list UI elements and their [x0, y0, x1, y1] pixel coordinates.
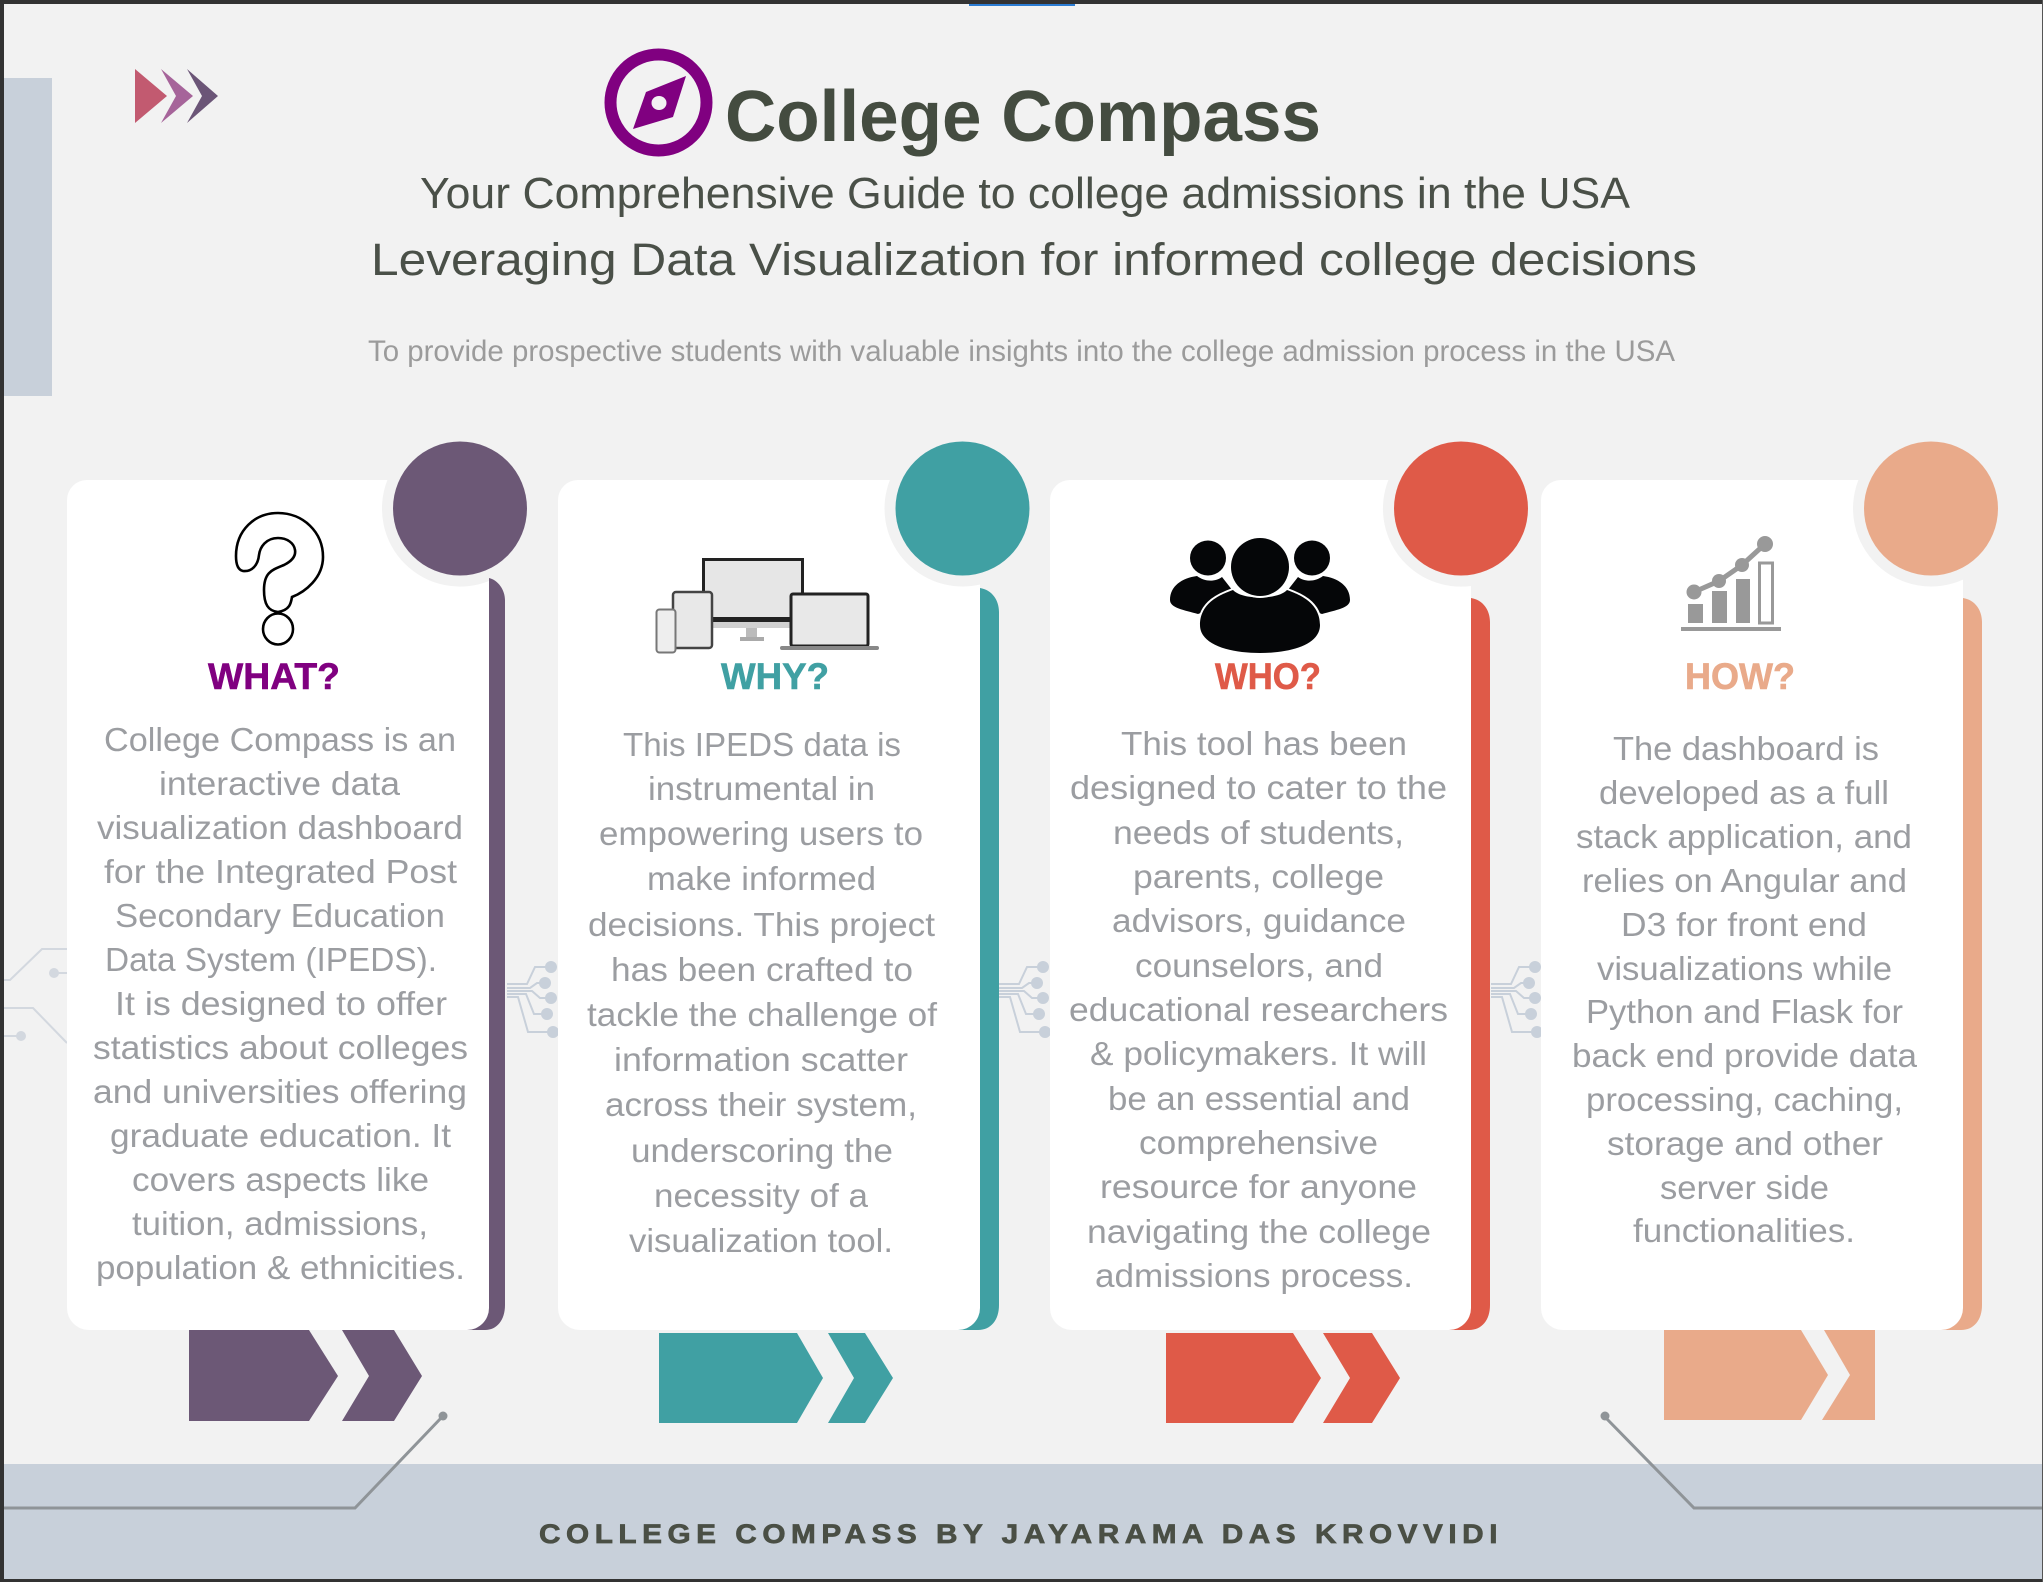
body text: back end provide data: [1572, 1037, 1918, 1074]
arrow: how chevrons: [1664, 1330, 1875, 1420]
arrow: what chevrons: [189, 1330, 422, 1421]
body text: has been crafted to: [611, 951, 913, 988]
body text: underscoring the: [631, 1132, 893, 1169]
panel: why: [558, 442, 1030, 1423]
side accent block: [4, 78, 52, 396]
badge circle: [393, 442, 527, 576]
body text: statistics about colleges: [93, 1029, 468, 1066]
body text: developed as a full: [1599, 774, 1889, 811]
body text: information scatter: [614, 1041, 908, 1078]
icon: triple chevrons: [135, 69, 218, 123]
body text: covers aspects like: [132, 1161, 429, 1198]
body text: tackle the challenge of: [587, 996, 938, 1033]
body text: functionalities.: [1633, 1212, 1855, 1249]
icon: people: [1170, 538, 1350, 653]
body text: for the Integrated Post: [104, 853, 457, 890]
body text: be an essential and: [1108, 1080, 1410, 1117]
panel: what: [67, 442, 527, 1421]
connector line right: [1600, 1412, 2042, 1508]
body text: graduate education. It: [110, 1117, 451, 1154]
body text: parents, college: [1133, 858, 1384, 895]
connector line left: [4, 1412, 448, 1508]
body text: empowering users to: [599, 815, 923, 852]
body text: [93, 721, 468, 1286]
body text: necessity of a: [654, 1177, 869, 1214]
body text: comprehensive: [1139, 1124, 1378, 1161]
subtitle line 1: Your Comprehensive Guide to college admissions in the USA: [420, 169, 1631, 218]
panel: who: [1050, 442, 1528, 1423]
body text: educational researchers: [1069, 991, 1448, 1028]
circuit decoration: between who and how: [1491, 961, 1543, 1038]
body text: Python and Flask for: [1586, 993, 1903, 1030]
body text: decisions. This project: [588, 906, 935, 943]
arrow: why chevrons: [659, 1333, 893, 1423]
accent bar: [1930, 598, 1982, 1330]
body text: counselors, and: [1135, 947, 1383, 984]
body text: & policymakers. It will: [1090, 1035, 1427, 1072]
badge circle: [1394, 442, 1528, 576]
body text: tuition, admissions,: [132, 1205, 428, 1242]
circuit decoration: between what and why: [507, 961, 559, 1038]
body text: visualizations while: [1597, 950, 1892, 987]
body text: College Compass is an: [104, 721, 456, 758]
footer credit: COLLEGE COMPASS BY JAYARAMA DAS KROVVIDI: [539, 1519, 1503, 1549]
body text: visualization tool.: [629, 1222, 893, 1259]
panel: how: [1541, 442, 1998, 1420]
card: [67, 480, 489, 1330]
body text: visualization dashboard: [97, 809, 463, 846]
body text: population & ethnicities.: [96, 1249, 465, 1286]
body text: navigating the college: [1087, 1213, 1431, 1250]
body text: [587, 726, 938, 1259]
body text: across their system,: [605, 1086, 917, 1123]
body text: storage and other: [1607, 1125, 1883, 1162]
body text: designed to cater to the: [1070, 769, 1447, 806]
icon: devices: [656, 560, 879, 652]
body text: and universities offering: [93, 1073, 467, 1110]
body text: [1069, 725, 1448, 1294]
body text: stack application, and: [1576, 818, 1912, 855]
icon: question mark: [236, 513, 323, 644]
title: College Compass: [725, 77, 1321, 157]
body text: processing, caching,: [1586, 1081, 1903, 1118]
body text: The dashboard is: [1613, 730, 1879, 767]
circuit decoration: between why and who: [999, 961, 1051, 1038]
card: [1050, 480, 1471, 1330]
heading: HOW?: [1685, 656, 1795, 697]
body text: It is designed to offer: [115, 985, 447, 1022]
body text: server side: [1660, 1169, 1829, 1206]
tagline: To provide prospective students with valuable insights into the college admission process in the USA: [368, 335, 1675, 368]
accent bar: [950, 588, 999, 1330]
body text: interactive data: [159, 765, 401, 802]
card: [558, 480, 980, 1330]
body text: Data System (IPEDS).: [105, 941, 437, 978]
accent bar: [460, 578, 505, 1330]
footer band: [4, 1464, 2042, 1579]
body text: This tool has been: [1121, 725, 1407, 762]
badge circle: [1864, 442, 1998, 576]
body text: This IPEDS data is: [623, 726, 901, 763]
heading: WHY?: [721, 656, 829, 697]
subtitle line 2: Leveraging Data Visualization for informed college decisions: [371, 234, 1697, 285]
body text: D3 for front end: [1621, 906, 1867, 943]
icon: compass logo: [610, 54, 706, 150]
arrow: who chevrons: [1166, 1333, 1400, 1423]
circuit decoration: left edge: [4, 949, 67, 1043]
body text: advisors, guidance: [1112, 902, 1406, 939]
body text: resource for anyone: [1100, 1168, 1417, 1205]
heading: WHAT?: [208, 656, 340, 697]
heading: WHO?: [1215, 656, 1321, 697]
body text: Secondary Education: [115, 897, 445, 934]
body text: needs of students,: [1113, 814, 1404, 851]
body text: admissions process.: [1095, 1257, 1413, 1294]
card: [1541, 480, 1963, 1330]
badge circle: [896, 442, 1030, 576]
body text: make informed: [647, 860, 876, 897]
body text: [1572, 730, 1918, 1249]
accent bar: [1440, 598, 1490, 1330]
body text: relies on Angular and: [1582, 862, 1907, 899]
body text: instrumental in: [648, 770, 875, 807]
icon: growth chart: [1681, 536, 1781, 631]
